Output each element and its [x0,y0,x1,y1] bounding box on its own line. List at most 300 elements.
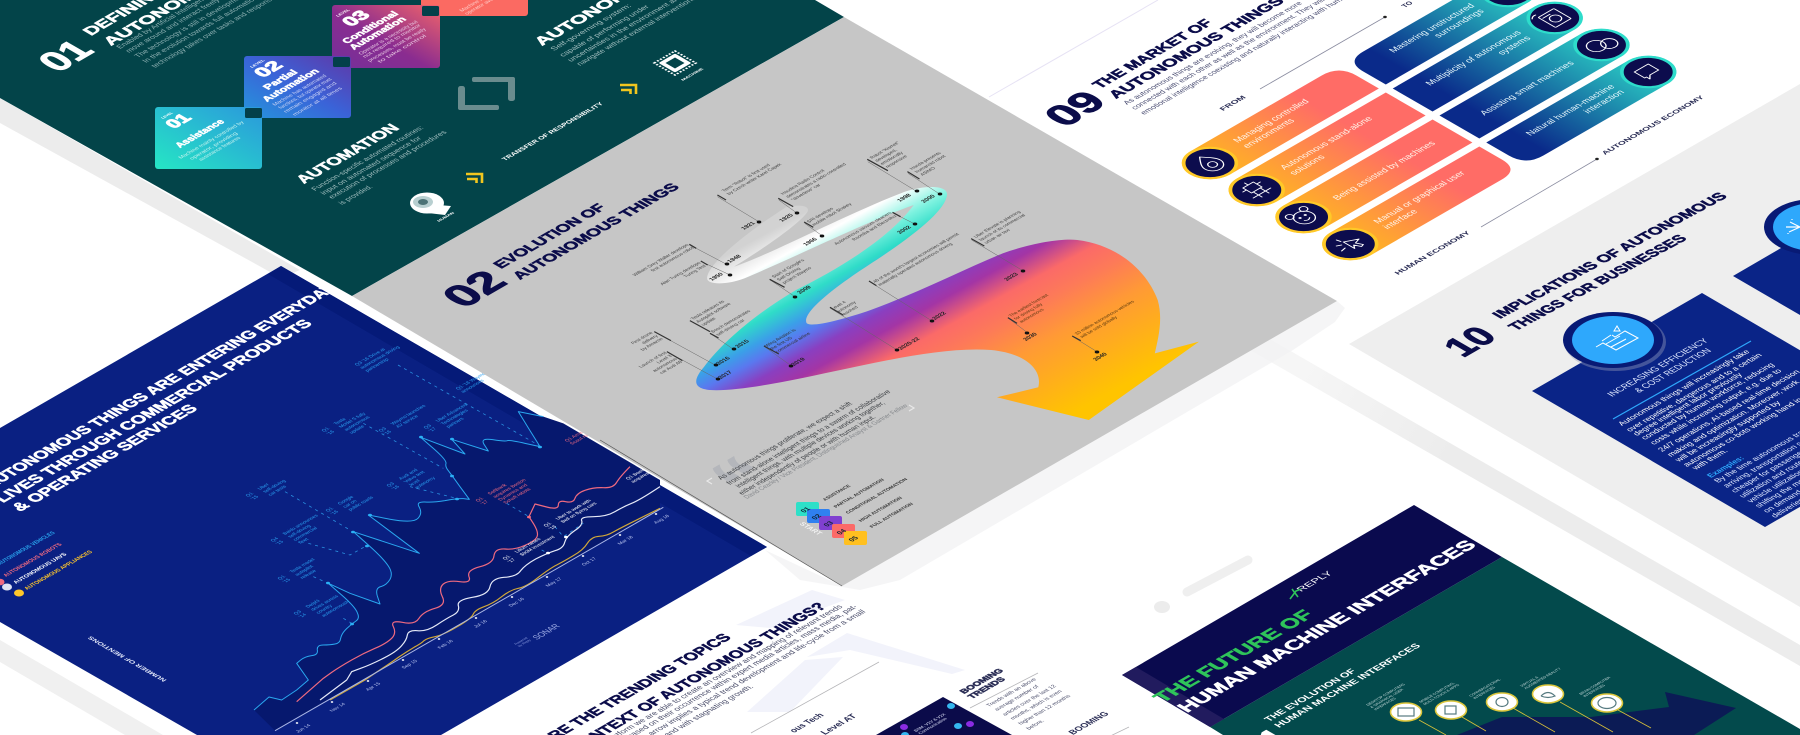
chart annotations: '15 [282,578,293,584]
chart annotations: Q3 [377,427,389,433]
booming trends text: average number of [994,685,1041,712]
chart legend [0,531,95,596]
time axis labels: Jun 14 [295,723,313,734]
chart annotations: level [408,479,422,487]
heading: the market: THE MARKET OF [1089,17,1217,91]
automation level legend: PARTIAL AUTOMATION [833,478,887,509]
timeline ribbon arrow [696,187,1199,420]
quote: from stand-alone intelligent things to a swarm of collaborative [724,388,893,486]
pill matrix: Multiplicity of autonomous [1423,29,1524,87]
chart annotations: country [315,604,335,615]
timeline years: 2002 [897,225,914,235]
icon: transfer logo [458,77,515,110]
interface labels: & GRAPHICAL USER [1369,688,1405,709]
booming trends label: TRENDS [965,675,1008,700]
icon rings [1173,142,1388,266]
level 2 diamond: Partial [261,68,301,92]
quote: As autonomous things proliferate, we expect a shift [715,400,855,481]
chart annotations: Tesla [333,417,348,426]
card body [1616,348,1800,472]
interface labels: VIRTUAL & [1519,676,1540,688]
chart area below blue curve [254,412,660,731]
card body: over repetitive, dangerous and to a certain [1624,352,1765,433]
timeline event labels: the first US [769,336,794,351]
level 4 diamond [421,0,528,16]
interface labels: MULTI-TOUCH & APPS [1422,683,1461,706]
timeline years: 2009 [797,285,814,295]
timeline event labels: SRI develops [806,206,836,224]
automation level legend: 02 [811,514,824,521]
chart annotations: autonomously [320,599,353,618]
time axis labels: Nov 14 [329,702,348,713]
chart annotations [244,342,656,625]
interface labels: AUGMENTED REALITY [1523,667,1563,690]
timeline event labels: Autopilot software [695,302,733,324]
timeline years: 2000 [921,194,938,204]
chart annotations: Bell on flying cars [560,501,599,524]
timeline event labels: emotionally [879,151,906,166]
card: second implication [1733,199,1800,315]
boom labels [787,710,1111,735]
chart annotations: Volvo test [403,470,427,484]
pill matrix: interaction [1581,88,1627,115]
panel: implications sheet [1349,84,1800,607]
chart annotations: Waymo launches [390,404,428,426]
card body: conducted by human workforce, reducing [1639,361,1777,441]
chart annotations: Q1 '18 Waymo [455,372,488,391]
timeline event labels: Start of Google's [771,258,807,279]
booming trends text [986,677,1073,731]
timeline event labels: Bosch demonstrates [710,309,753,334]
panel: grey evolution sheet [352,17,1337,586]
divider rules [751,662,1129,735]
chart annotations: Technologies [440,408,471,426]
chart annotations: partners [445,417,466,429]
timeline event labels: Level 4 [830,300,848,311]
timeline event labels: autonomous [1018,308,1046,324]
level 3 diamond [332,5,440,68]
chart annotations: autonomous driving [359,345,402,370]
quote: intelligent things, with multiple devices working together, [733,400,887,489]
level 1 diamond: operator, providing [189,131,240,161]
booming trends text: before. [1026,719,1047,731]
chart annotations: '14 [298,613,309,619]
device dot [1154,601,1170,613]
time axis labels: May 17 [545,577,564,588]
timeline event labels: ASIMO [919,166,938,177]
interface labels: MOBILE COMPUTING, [1418,682,1456,704]
chart annotations: autonomous [343,415,372,432]
interface icons [1390,685,1622,721]
timeline years: 2015 [735,339,752,349]
timeline event labels: Honda presents [909,151,943,171]
chart annotations: '17 [507,558,518,564]
timeline event labels: demonstrates a radio-controlled [785,162,848,199]
timeline event labels: project Waymo [781,266,814,285]
thin lavender line [989,0,1158,97]
source logo: Sonar: by Reply [517,639,532,648]
heading: evolution of hmi: HUMAN MACHINE INTERFACES [1272,642,1424,730]
timeline dots [714,190,1099,380]
chart annotations: Q1 [320,427,332,433]
blue pills: autonomous economy [1346,0,1688,166]
chart annotations: '16 [383,430,394,436]
autonomy text: Self-governing system: [548,2,634,52]
autonomy text: uncertainties in the environment and [565,0,685,63]
automation level legend: HIGH AUTOMATION [858,496,905,523]
timeline event labels: autonomy [835,300,859,314]
boom labels: ous Tech [787,711,826,734]
timeline event labels: launch of its commercial [978,213,1027,242]
interface labels: DESKTOP COMPUTERS [1365,683,1407,707]
chart heading: LIVES THROUGH COMMERCIAL PRODUCTS [0,317,317,505]
chart annotations: Schaft robots [502,487,533,505]
chart annotations: '16 [330,510,341,516]
timeline event labels: 40 of the world's largest economies will permit [872,232,962,284]
card examples: Examples: [1705,455,1747,479]
timeline event labels: Alan Turing develops [659,261,703,286]
timeline event labels: Level 3 [655,354,674,365]
level 3 diamond: not required to monitor [362,23,423,59]
section number 09: 09 [1035,85,1116,133]
timeline event labels: Launch of first [638,351,669,369]
watermark logo [736,590,965,712]
timeline event labels: Roomba and Electrolux [851,214,899,242]
pill labels: Managing controlled [1231,98,1311,144]
time axis labels: Apr 15 [365,682,383,692]
timeline years: 2030 [1023,332,1040,342]
timeline event labels: Autonomous vacuum cleaners [833,211,894,246]
source logo: Sonar: Powered [513,637,529,646]
timeline event labels: car Audi A8 [658,360,685,375]
section number 01: 01 [29,35,103,78]
level 3 diamond: Automation [347,15,409,52]
chart annotations: Q1 Boeing [625,466,650,481]
icon: machine chip [654,51,705,82]
timeline event labels: self-driving car [715,318,747,337]
chart legend: AUTONOMOUS ROBOTS [3,542,64,578]
heading: evolution: EVOLUTION OF [490,201,610,271]
timeline event labels: Self-Driving [776,266,803,282]
card rule [1613,341,1751,419]
chart annotations: partnership [364,357,391,373]
timeline years: 2020-22 [898,337,922,351]
level 2 diamond: monitor at all times [292,86,345,117]
chart annotations: Audi and [398,468,420,481]
timeline years: 2022 [932,311,949,321]
timeline event labels: Houdina Radio Control [780,169,827,196]
panel: pale shadow under grey sheet [765,301,1345,590]
level 1 diamond: LEVEL [160,111,175,120]
chart annotations: Delphi [305,599,322,609]
automation level legend: 04 [836,529,849,536]
timeline years: 2017 [718,370,735,380]
yellow connector lines [1419,702,1651,735]
automation level legend: FULL AUTOMATION [869,502,916,529]
timeline event labels: Uber Elevate is planning [973,210,1023,239]
pill matrix: Mastering unstructured [1387,2,1477,54]
heading: implications: IMPLICATIONS OF AUTONOMOUS [1489,190,1731,321]
chart annotations: public roads [347,495,376,512]
chart legend: AUTONOMOUS APPLIANCES [24,550,95,591]
time axis labels: Mar 18 [617,535,635,546]
chart annotations: '17 [428,427,439,433]
timeline event labels: Term "Robot" is first used [721,163,772,193]
axis labels and arrows [1219,0,1707,276]
time axis labels: Dec 16 [508,597,527,608]
timeline event labels: William Grey Walter develops [631,243,691,277]
timeline event labels: First drone [630,331,655,345]
chart annotations: car on [342,499,359,509]
header band [1122,505,1502,727]
timeline event labels: by Czech writer Karel Čapek [725,162,784,196]
timeline event labels: Robot "Kismet" [869,141,902,160]
interface labels: INTERFACES [1582,684,1607,698]
timeline years: 1948 [727,254,744,264]
timeline event labels: will be sold globally [1079,315,1120,339]
chart heading: & OPERATING SERVICES [9,402,202,514]
pill labels: solutions [1287,153,1327,177]
logo: Reply: REPLY [1294,569,1335,593]
trend chart dark card [876,697,1012,735]
trend chart dark card: BSM, V2V & V2X [913,713,947,733]
automation level legend: 03 [823,521,836,528]
chart annotations: self-driving [262,479,288,494]
booming trends text: higher than 12 months [1018,694,1073,726]
line icons [1188,0,1668,254]
chart annotations: '18 [548,525,559,531]
heading: evolution of hmi: THE EVOLUTION OF [1262,667,1359,724]
timeline years: 1966 [803,237,820,247]
booming trends text: Trends with an above [986,677,1038,708]
interface icon glyphs [1398,692,1616,716]
chart annotations: car tests [267,484,289,497]
chart annotations: Lilium raises [514,537,543,554]
header left edge strip [1122,667,1224,727]
card body: costs while increasing output, e.g. due to [1648,367,1784,446]
chart annotations: '17 [480,500,491,506]
chart data point dots [326,436,568,625]
chart annotations: Softbank [487,483,509,496]
booming trends label [957,667,1008,700]
timeline years: 2016 [716,356,733,366]
chart annotations: Uber [257,482,271,491]
panel: future of human machine interfaces [1122,505,1800,735]
timeline event labels: update [700,317,718,327]
pill labels [1231,82,1488,231]
line chart [254,365,663,731]
timeline years: 2040 [1093,352,1110,362]
chart annotations: '15 [275,540,286,546]
automation text: input on automated sequence for [318,135,424,196]
automation level legend: CONDITIONAL AUTOMATION [845,477,910,515]
chart annotations: Q1 [542,522,554,528]
card body: Autonomous things will increasingly take [1616,348,1752,427]
icon: yellow chevrons lower [466,174,482,183]
chart annotations: Q1 [501,555,513,561]
pill matrix: Assisting smart machines [1477,59,1577,117]
chart axis ticks [296,513,657,724]
level 2 diamond: remain engaged and [283,81,339,114]
quote mark: “ [690,445,801,510]
logo: Reply [1290,569,1335,599]
timeline event labels: reached [840,305,860,317]
chart annotations: autopilot [294,564,316,577]
chart annotations: Uber to work with [555,499,593,521]
level 3 diamond: Conditional [340,10,402,46]
icon: yellow chevrons upper [620,85,636,94]
booming trends label: BOOMING [957,667,1006,695]
timeline event labels: by Amazon [639,337,665,352]
autonomy text: capable of performing under [557,3,652,58]
pill labels: Manual or graphical user [1371,169,1467,225]
level 2 diamond: 02 [249,58,287,80]
trend chart dark card: Communication [917,717,949,735]
level 1 diamond [155,107,262,169]
level 3 diamond: 03 [337,7,374,29]
automation level legend: 05 [848,536,861,543]
card body: degree intelligent labor previously [1631,371,1745,437]
timeline event labels: Wing Aviation is [764,328,798,348]
heading: automation: AUTOMATION [293,122,404,186]
blue line: autonomous vehicles [254,412,543,710]
timeline event labels: developed, [874,148,899,163]
pill matrix [1170,0,1688,267]
axis labels and arrows: FROM [1219,95,1248,112]
heading: the market: AUTONOMOUS THINGS IS [1105,0,1307,101]
level 3 diamond: Operator is a necessity but [358,20,420,56]
chart annotations: Baidu announces [282,513,321,536]
chart annotations: fleet [297,537,311,545]
timeline years: 1950 [709,272,726,282]
chart annotations: Google [337,495,356,506]
chart annotations: Q4 [269,537,281,543]
chart annotations: '15 [250,495,261,501]
timeline event labels: autonomous [651,357,680,373]
darker edge band [268,266,767,556]
chart annotations: acquires Boston [492,478,528,499]
pill matrix: systems [1495,34,1533,56]
title: human machine interfaces: HUMAN MACHINE INTERFACES [1173,537,1481,716]
automation level legend: 01 [800,507,813,514]
chart annotations: $90M investment [519,535,557,557]
chart annotations: release [299,569,318,580]
automation level legend: ASSISTANCE [822,484,853,502]
timeline event labels: delivery [640,334,660,345]
icon: human head: HUMAN [436,211,456,223]
level 1 diamond: Assistance [173,118,228,150]
pill labels: Autonomous stand-alone [1278,115,1375,171]
chart annotations: '16 [326,430,337,436]
level 1 diamond: assistance features [198,136,243,162]
automation level legend [796,477,916,545]
time axis labels: Sep 15 [401,659,420,670]
chart annotations: AV service [395,414,420,429]
timeline event labels: Turing Test [682,264,709,279]
level 2 diamond: Machine has automated [272,74,329,107]
market intro text: As autonomous things are evolving, they will become more [1121,0,1304,106]
chart annotations: update [348,424,367,435]
chart annotations: Dynamics and [497,483,530,502]
level 2 diamond: Automation [260,67,322,104]
market intro text: connected with each other as well as the environment. They will [1129,0,1327,111]
timeline event labels: "driverless" car [790,183,823,202]
pill labels: environments [1240,117,1297,150]
automation text: Function-specific automated routines: [309,124,426,192]
level 3 diamond: LEVEL [335,8,352,18]
time axis labels: Aug 18 [653,514,672,525]
timeline event labels: urban air taxi [983,228,1012,245]
chart annotations: Q3 '16 Drive.ai [354,348,387,367]
device pill [1187,560,1248,592]
navy arrow [1457,692,1736,735]
card heading: INCREASING EFFICIENCY [1605,337,1712,399]
timeline event labels [629,141,1142,378]
timeline event labels: first autonomous robot [650,246,697,273]
timeline years: 2019 [791,357,808,367]
chart annotations: Tesla model [289,558,317,574]
heading: implications: THINGS FOR BUSINESSES [1505,232,1691,333]
chart annotations: Q1 [276,575,288,581]
chart annotations: Scout robots [569,429,599,446]
timeline event labels: humanoid robot [914,154,948,174]
section number 02: 02 [431,264,517,314]
chart annotations: autonomy [413,476,438,490]
y axis label: NUMBER OF MENTIONS [87,635,169,682]
timeline event labels: materially operated autonomous driving [877,242,955,287]
timeline event labels: Tesla releases its [690,299,727,321]
panel: trending topics sheet [492,590,1129,735]
chart annotations: announces [460,379,486,394]
yellow line: autonomous appliances [330,508,660,700]
time axis labels: Oct 17 [581,557,599,567]
automation text: is provided. [336,183,375,206]
timeline years [709,193,1110,380]
axis labels and arrows: HUMAN ECONOMY [1394,230,1473,276]
time axis labels: Feb 16 [437,639,455,650]
interface labels: CONVERSATIONAL [1468,678,1502,698]
level 1 diamond: Machine mainly controlled by [178,120,246,160]
pill labels: interface [1381,208,1420,231]
chart annotations: drives across [310,594,341,612]
timeline years: 1998 [897,193,914,203]
chart annotations: '16 [391,485,402,491]
level 2 diamond: functions, but operator must [278,77,334,110]
source logo: Sonar: SONAR [530,622,562,641]
level 1 diamond: 01 [161,111,196,131]
interface labels [1365,665,1616,711]
booming trends text: months, which is even [1010,690,1064,721]
level 3 diamond: to take control [377,34,428,64]
source logo: Sonar [513,622,562,648]
axis line [275,507,663,731]
icon: machine chip: MACHINE [680,67,705,82]
chart legend: AUTONOMOUS UAVS [13,552,69,585]
chart annotations: Q3 [422,424,434,430]
icon badge: efficiency [1563,312,1666,371]
chart annotations: Q3 [385,482,397,488]
small junction squares [245,6,439,118]
booming trends text: articles over the last 12 [1002,684,1058,717]
timeline leader lines [654,159,1097,379]
card body: 24/7 operations, AI-based real-time decision [1656,368,1800,453]
level 2 diamond [244,56,351,118]
level 2 diamond: LEVEL [249,58,266,69]
panel: lower right strip [1250,338,1800,666]
timeline event labels: commercial airline [774,332,813,354]
red line: autonomous robots [297,467,630,702]
time axis labels [295,514,672,734]
